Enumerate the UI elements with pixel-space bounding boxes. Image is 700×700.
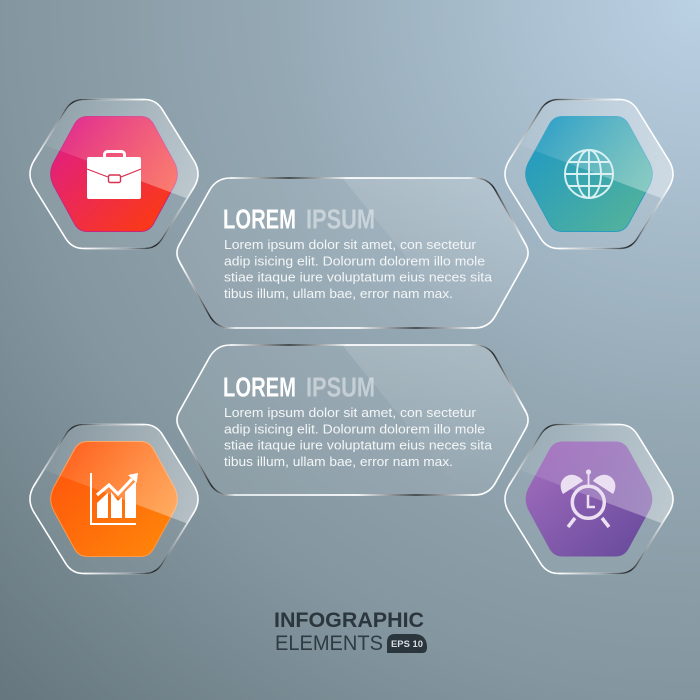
- body text 2: Lorem ipsum dolor sit amet, con sectetur: [224, 406, 476, 420]
- icon: globe: [565, 150, 613, 198]
- glass reflection: [528, 425, 672, 523]
- icon: briefcase: [87, 152, 141, 199]
- panel: text 2: [177, 344, 532, 496]
- heading 2 accent: IPSUM: [306, 372, 375, 402]
- coloured hexagon: purple: [526, 442, 652, 556]
- glass border: [30, 100, 198, 248]
- body text 1: Lorem ipsum dolor sit amet, con sectetur: [224, 238, 476, 252]
- body text 2: [224, 406, 492, 469]
- body text 1: [224, 238, 492, 301]
- coloured hexagon: pink: [51, 116, 177, 232]
- glass reflection: [534, 100, 672, 198]
- glass reflection: [50, 100, 198, 198]
- hexagon: chart: [29, 424, 199, 574]
- hexagon: briefcase: [29, 98, 199, 250]
- hexagon: clock: [504, 424, 674, 574]
- body text 1: tibus illum, ullam bae, error nam max.: [224, 287, 453, 301]
- panel reflection: [344, 346, 519, 406]
- body text 2: adip isicing elit. Dolorum dolorem illo mole: [224, 422, 485, 436]
- panel border: [177, 178, 528, 328]
- glass reflection: [46, 425, 198, 523]
- heading 1: LOREM: [223, 204, 296, 234]
- heading 1 accent: IPSUM: [306, 204, 375, 234]
- heading 2: LOREM: [223, 372, 296, 402]
- body text 1: stiae itaque iure voluptatum eius neces sita: [224, 271, 492, 285]
- panel: text 1: [177, 177, 532, 329]
- badge: EPS 10: EPS 10: [391, 639, 423, 650]
- body text 2: stiae itaque iure voluptatum eius neces sita: [224, 439, 492, 453]
- panel border: [177, 345, 528, 495]
- body text 1: adip isicing elit. Dolorum dolorem illo mole: [224, 254, 485, 268]
- hexagon: globe: [504, 98, 674, 250]
- body text 2: tibus illum, ullam bae, error nam max.: [224, 455, 453, 469]
- icon: alarm clock: [561, 469, 615, 527]
- coloured hexagon: orange: [51, 442, 177, 556]
- footer title: INFOGRAPHIC: [274, 609, 424, 632]
- glass border: [30, 424, 198, 574]
- glass border: [505, 100, 673, 248]
- badge: EPS 10: [387, 634, 427, 653]
- coloured hexagon: teal: [526, 116, 652, 232]
- panel reflection: [344, 179, 512, 232]
- glass border: [505, 424, 673, 574]
- footer subtitle: ELEMENTS: [275, 632, 383, 655]
- icon: growth chart: [91, 473, 138, 524]
